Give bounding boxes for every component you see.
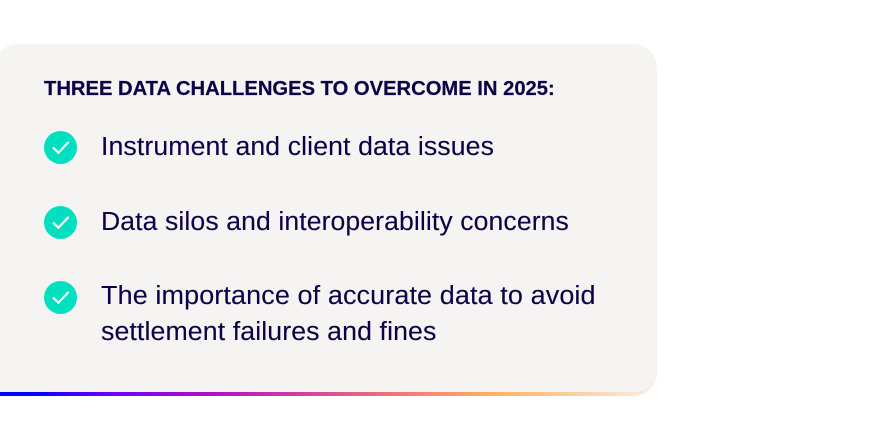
list item 3: The importance of accurate data to avoid — [101, 282, 596, 310]
list item 3: settlement failures and fines — [101, 318, 436, 346]
list item 2: Data silos and interoperability concerns — [101, 208, 569, 236]
list item 3 — [101, 282, 596, 346]
heading: THREE DATA CHALLENGES TO OVERCOME IN 2025: — [44, 78, 555, 100]
panel: data challenges card — [0, 44, 657, 396]
icon: check 1 — [44, 131, 77, 164]
icon: check 2 — [44, 206, 77, 239]
icon: check 3 — [44, 281, 77, 314]
card background with gradient bottom edge — [0, 44, 657, 396]
list item 1: Instrument and client data issues — [101, 133, 494, 161]
